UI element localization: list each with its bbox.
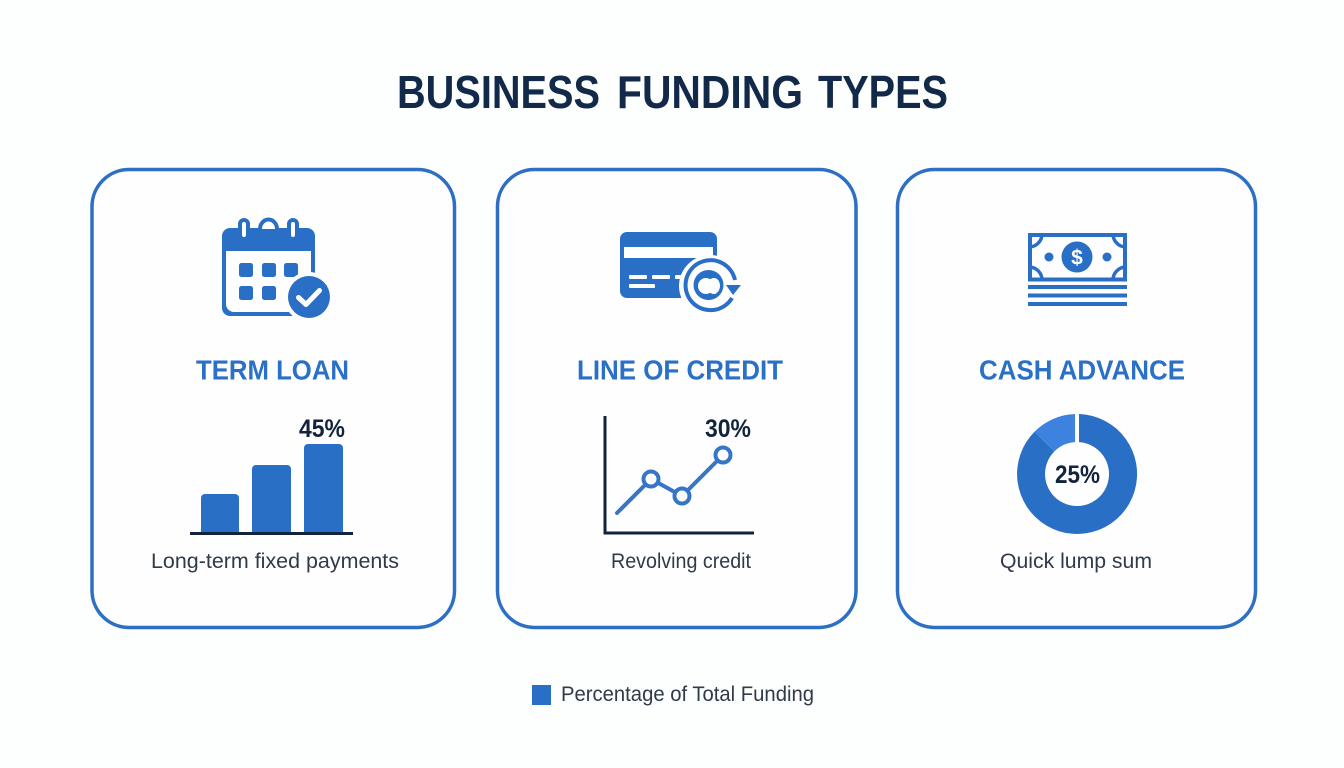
title: TYPES — [818, 66, 948, 118]
line chart: 30% — [605, 415, 754, 533]
description: term loan: Long-term fixed payments — [151, 550, 399, 573]
heading: line of credit: LINE OF CREDIT — [577, 354, 783, 386]
title: FUNDING — [617, 66, 803, 118]
donut chart: 25% — [1017, 414, 1137, 534]
heading: cash advance: CASH ADVANCE — [979, 354, 1185, 386]
donut chart: 25%: 25% — [1055, 461, 1100, 489]
icon: credit card with revolving arrow — [620, 232, 741, 317]
panel: cash advance — [898, 170, 1256, 628]
legend: Percentage of Total Funding — [561, 683, 814, 706]
icon: banknote stack: $ — [1071, 246, 1083, 270]
line chart: 30%: 30% — [705, 415, 751, 443]
title: BUSINESS — [397, 66, 600, 118]
description: cash advance: Quick lump sum — [1000, 550, 1152, 573]
heading: term loan: TERM LOAN — [196, 354, 349, 386]
bar chart: 45% — [190, 415, 353, 535]
panel: term loan — [92, 170, 454, 628]
description: line of credit: Revolving credit — [611, 550, 751, 573]
icon: banknote stack — [1028, 234, 1127, 306]
icon: calendar with check — [222, 220, 334, 322]
panel: line of credit — [498, 170, 856, 628]
bar chart: 45%: 45% — [299, 415, 345, 443]
